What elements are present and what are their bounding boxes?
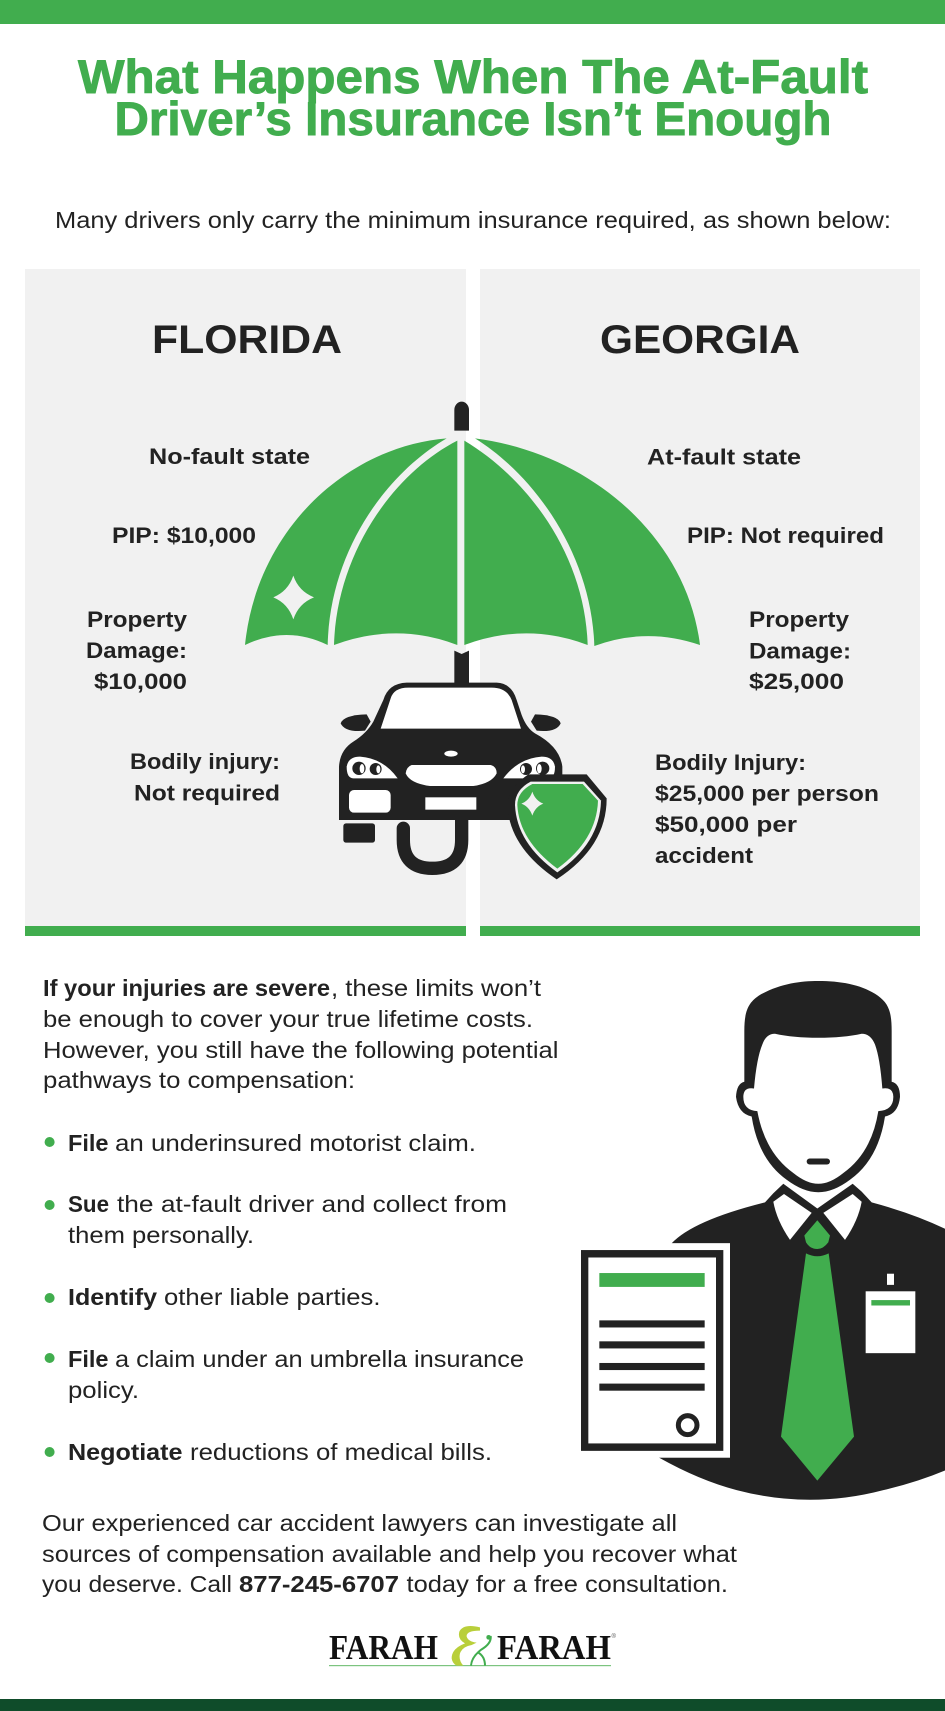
title: Driver’s Insurance Isn’t Enough (114, 92, 831, 145)
bullet: negotiate bills (45, 1439, 492, 1465)
Florida: bodily injury (130, 749, 280, 806)
title (78, 50, 868, 145)
umbrella ferrule (454, 402, 469, 431)
panel: Georgia (480, 269, 920, 936)
Florida: PIP: PIP: $10,000 (112, 523, 256, 548)
logo: Farah & Farah: FARAH (329, 1628, 438, 1667)
Florida heading: FLORIDA (152, 318, 342, 362)
lawyer head (736, 981, 900, 1192)
car (339, 683, 562, 843)
Florida: property damage: Damage: (86, 638, 187, 663)
Georgia heading: GEORGIA (600, 318, 800, 362)
closing paragraph: today for a free consultation. (406, 1571, 728, 1597)
Georgia: at-fault state: At-fault state (647, 444, 801, 470)
bottom dark green bar (0, 1699, 945, 1711)
Georgia: PIP: PIP: Not required (687, 523, 884, 548)
bullet: identify other parties: other liable parties. (164, 1284, 380, 1310)
title: What Happens When The At-Fault (78, 50, 868, 103)
bullet: sue the driver (45, 1191, 507, 1248)
name badge (866, 1274, 915, 1353)
bullet: identify other parties: Identify (68, 1284, 157, 1310)
Florida: property damage (86, 607, 188, 694)
bullet: umbrella policy: File (68, 1346, 108, 1372)
closing paragraph: 877-245-6707 (239, 1571, 399, 1597)
intro paragraph: However, you still have the following potential (43, 1037, 558, 1063)
bullet: negotiate bills: Negotiate (68, 1439, 182, 1465)
bullet: negotiate bills: reductions of medical bills. (190, 1439, 492, 1465)
shield (507, 774, 607, 879)
registered mark: ® (612, 1633, 616, 1640)
Georgia: property damage: Damage: (749, 638, 851, 664)
Florida green base strip (25, 926, 466, 936)
bullet: umbrella policy (45, 1346, 524, 1403)
icon: umbrella over car with shield (245, 402, 700, 879)
shirt collar (773, 1194, 862, 1240)
Florida: property damage: Property (87, 607, 188, 632)
bullet: file underinsured claim: an underinsured motorist claim. (115, 1130, 476, 1156)
lawyer body (659, 1184, 945, 1500)
Florida: no-fault state: No-fault state (149, 444, 310, 469)
logo: Farah & Farah (329, 1626, 616, 1667)
bullet: sue the driver: the at-fault driver and collect from (117, 1191, 507, 1217)
green tie (781, 1220, 854, 1481)
logo: Farah & Farah: FARAH (497, 1628, 611, 1667)
closing paragraph: you deserve. Call (42, 1571, 232, 1597)
intro paragraph: be enough to cover your true lifetime costs. (43, 1006, 533, 1032)
intro paragraph (43, 975, 558, 1093)
closing paragraph: sources of compensation available and help you recover what (42, 1541, 738, 1567)
Georgia: bodily injury: $50,000 per (655, 812, 797, 837)
Georgia: property damage: Property (749, 607, 850, 632)
umbrella sparkle (273, 576, 314, 619)
Florida: bodily injury: Bodily injury: (130, 749, 280, 774)
bullet: umbrella policy: policy. (68, 1377, 139, 1403)
Florida: property damage: $10,000 (94, 669, 187, 694)
top green bar (0, 0, 945, 24)
Florida: bodily injury: Not required (134, 780, 280, 806)
bullet: identify other parties (45, 1284, 380, 1310)
Georgia: bodily injury (655, 750, 879, 868)
umbrella canopy (245, 438, 700, 646)
document (573, 1243, 730, 1458)
intro paragraph: If your injuries are severe (43, 975, 330, 1001)
bullet: sue the driver: Sue (68, 1191, 109, 1217)
icon: lawyer holding document (573, 981, 945, 1500)
bullet: file underinsured claim: File (68, 1130, 108, 1156)
umbrella handle (403, 817, 462, 868)
bullet: umbrella policy: a claim under an umbrella insurance (115, 1346, 524, 1372)
Georgia green base strip (480, 926, 920, 936)
intro paragraph: , these limits won’t (331, 975, 542, 1001)
bullet: sue the driver: them personally. (68, 1222, 254, 1248)
Georgia: bodily injury: accident (655, 843, 754, 868)
Georgia: bodily injury: $25,000 per person (655, 781, 879, 806)
closing paragraph: Our experienced car accident lawyers can investigate all (42, 1510, 677, 1536)
intro sentence: Many drivers only carry the minimum insurance required, as shown below: (55, 207, 891, 233)
closing paragraph (42, 1510, 738, 1597)
Georgia: bodily injury: Bodily Injury: (655, 750, 806, 775)
umbrella pole (454, 651, 469, 687)
Georgia: property damage (749, 607, 851, 694)
intro paragraph: pathways to compensation: (43, 1067, 355, 1093)
Georgia: property damage: $25,000 (749, 669, 844, 694)
logo ampersand (452, 1626, 491, 1666)
panel: Florida (25, 269, 466, 936)
